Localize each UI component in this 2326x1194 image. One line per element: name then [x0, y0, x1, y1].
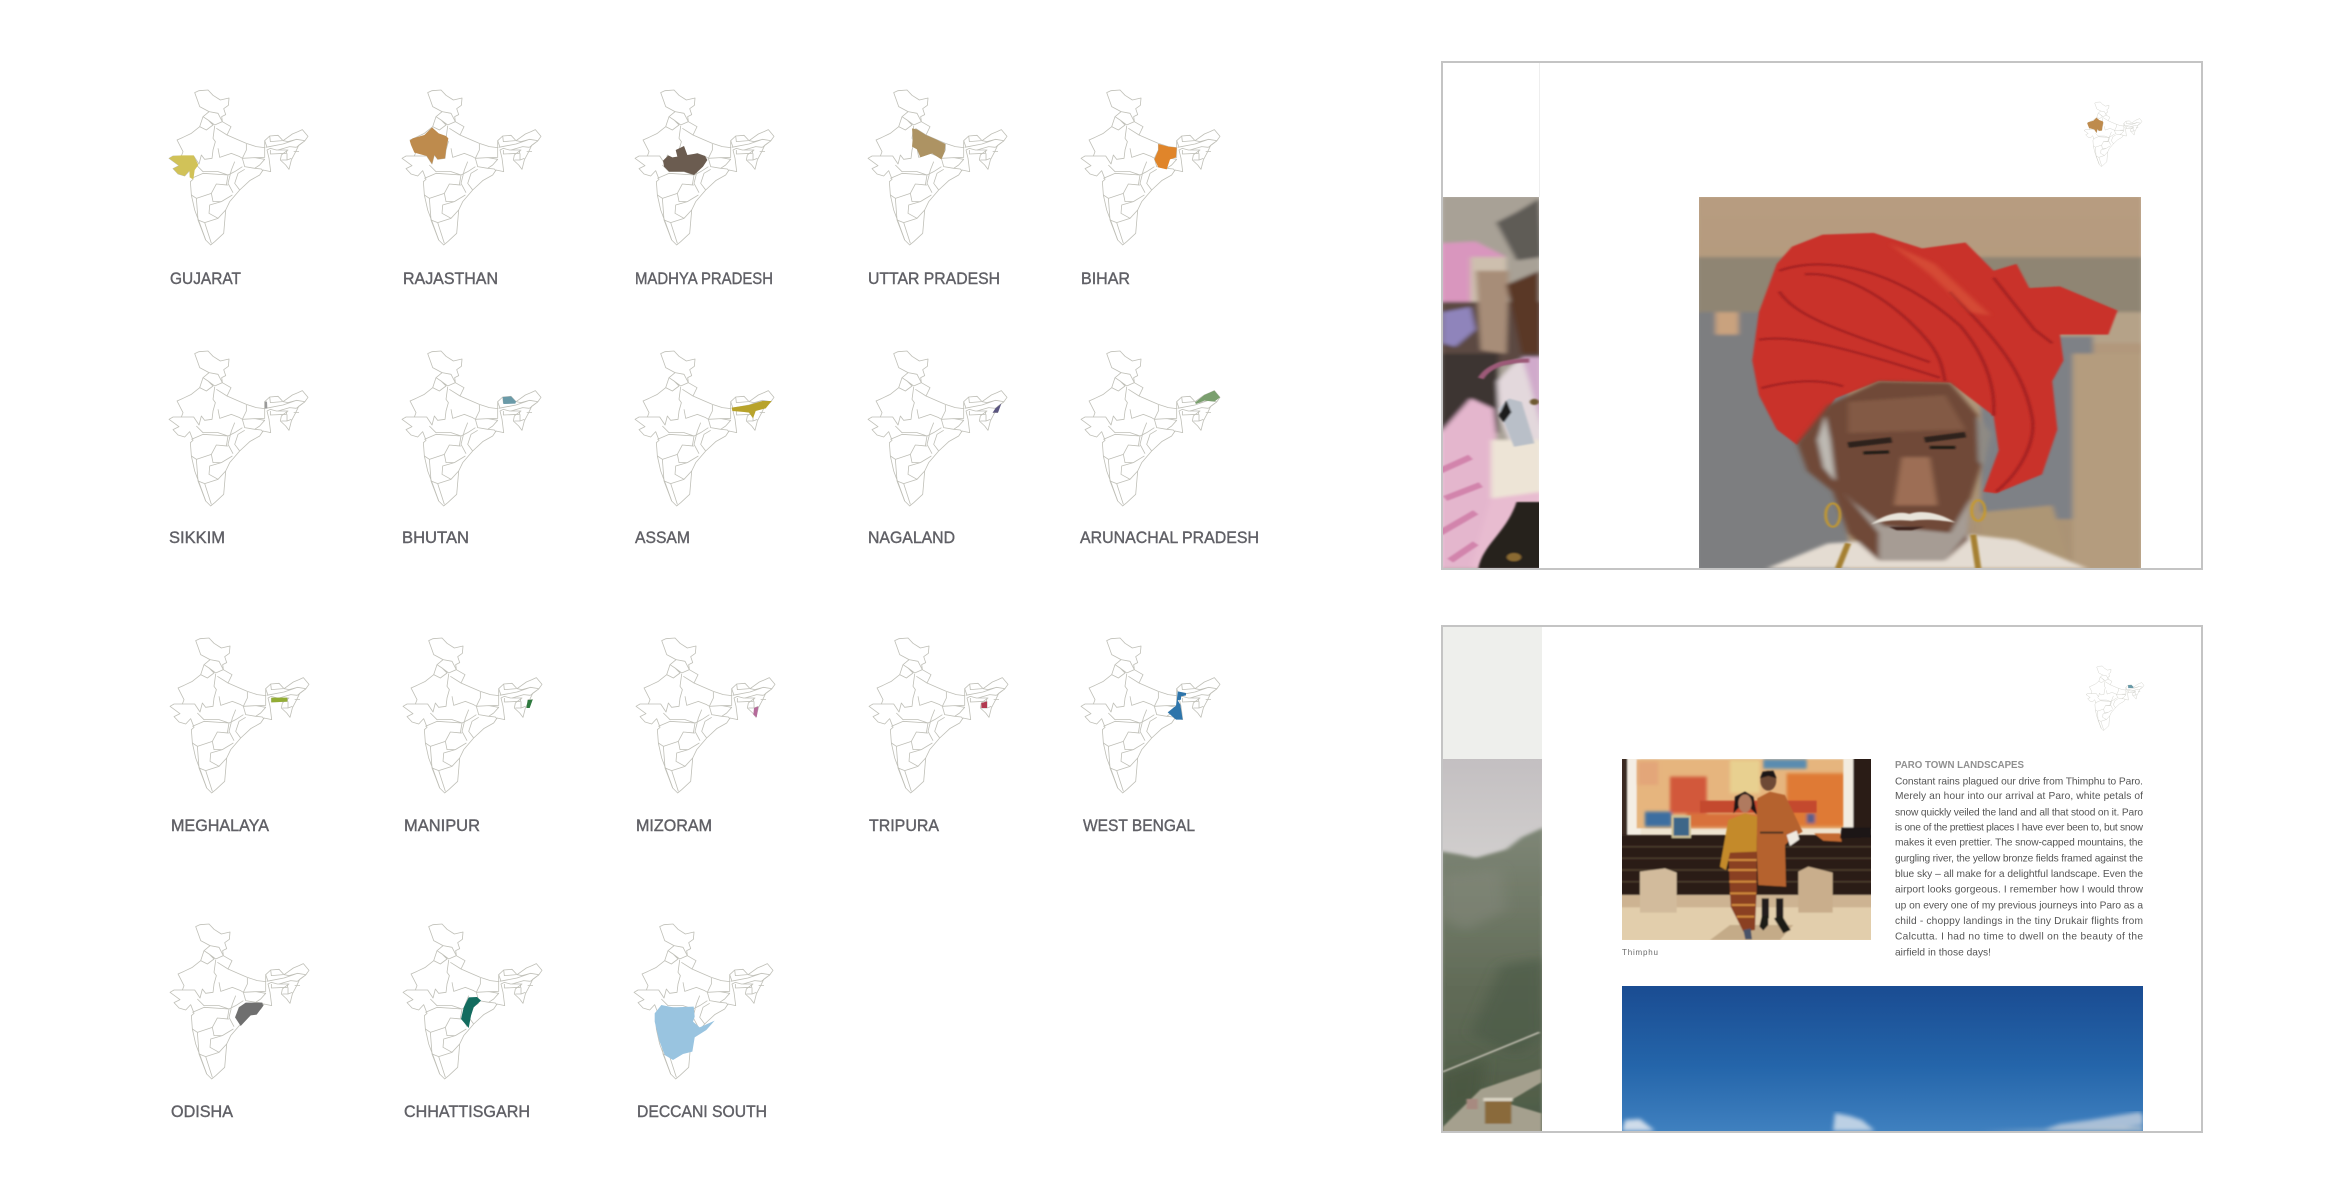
icon: mini India map with Rajasthan highlighted: [2084, 102, 2142, 167]
text block: Paro town landscapes: Merely an hour into our arrival at Paro, white petals of: [1895, 791, 2143, 802]
map tile: Arunachal Pradesh: [1080, 351, 1259, 547]
map tile: Rajasthan: [402, 90, 541, 288]
text block: Paro town landscapes: snow quickly veiled the land and all that stood on it. Paro: [1895, 808, 2143, 818]
photo: couple in Thimphu: [1620, 757, 1873, 943]
map tile: Deccani South: DECCANI SOUTH: [637, 1102, 767, 1121]
map tile: Uttar Pradesh: UTTAR PRADESH: [868, 269, 1000, 288]
map tile: Gujarat: GUJARAT: [170, 269, 241, 288]
map tile: Tripura: [869, 638, 1008, 835]
text block: Paro town landscapes: up on every one of my previous journeys into Paro as a: [1895, 900, 2143, 912]
map tile: Mizoram: [636, 638, 775, 835]
photo: man in red turban: [1695, 195, 2144, 571]
map tile: Mizoram: MIZORAM: [636, 816, 712, 835]
map tile: Assam: ASSAM: [635, 528, 690, 547]
caption: Thimphu: Thimphu: [1622, 948, 1658, 957]
text block: Paro town landscapes: gurgling river, the yellow bronze fields framed against the: [1895, 854, 2143, 864]
photo: snowy forest strip: [1440, 758, 1545, 1134]
map tile: Sikkim: [169, 351, 308, 547]
text block: Paro town landscapes: Constant rains plagued our drive from Thimphu to Paro.: [1895, 776, 2143, 788]
map tile: Madhya Pradesh: [635, 90, 774, 288]
map tile: Nagaland: NAGALAND: [868, 528, 955, 547]
text block: Paro town landscapes: airfield in those days!: [1895, 948, 1991, 958]
icon: mini India map with Bhutan highlighted: [2086, 666, 2144, 731]
text block: Paro town landscapes: is one of the prettiest places I have ever been to, but snow: [1895, 822, 2144, 834]
text block: Paro town landscapes: child - choppy landings in the tiny Drukair flights from: [1895, 916, 2143, 927]
map tile: Bihar: BIHAR: [1081, 269, 1130, 288]
map tile: Meghalaya: [170, 638, 309, 835]
map tile: Deccani South: [634, 924, 773, 1121]
map tile: Arunachal Pradesh: ARUNACHAL PRADESH: [1080, 528, 1259, 547]
panel: Bhutan page layout: [1440, 626, 2202, 1134]
map tile: Meghalaya: MEGHALAYA: [171, 816, 270, 835]
map tile: Bhutan: BHUTAN: [402, 528, 469, 547]
map tile: Uttar Pradesh: [868, 90, 1007, 288]
text block: Paro town landscapes: [1895, 759, 2144, 958]
left grey column: [1443, 627, 1542, 759]
map tile: Bhutan: [402, 351, 541, 547]
map tile: West Bengal: WEST BENGAL: [1083, 816, 1195, 835]
text block: Paro town landscapes: blue sky – all make for a delightful landscape. Even the: [1895, 869, 2143, 880]
map tile: Madhya Pradesh: MADHYA PRADESH: [635, 269, 773, 288]
map tile: Gujarat: [169, 90, 308, 288]
panel: Rajasthan page layout: [1440, 62, 2202, 571]
text block: Paro town landscapes: makes it even prettier. The snow-capped mountains, the: [1895, 838, 2143, 848]
photo: pink-dyed goats strip: [1440, 195, 1542, 571]
photo: blue sky over Paro: [1622, 986, 2143, 1131]
text block: Paro town landscapes: Calcutta. I had no time to dwell on the beauty of the: [1895, 932, 2143, 942]
map tile: Odisha: [170, 924, 309, 1121]
map tile: Sikkim: SIKKIM: [169, 528, 225, 547]
map tile: Chhattisgarh: [403, 924, 542, 1121]
map tile: Bihar: [1081, 90, 1220, 288]
map tile: Odisha: ODISHA: [171, 1102, 234, 1121]
map tile: Assam: [635, 351, 774, 547]
text block: Paro town landscapes: airport looks gorgeous. I remember how I would throw: [1895, 884, 2144, 896]
map tile: Nagaland: [868, 351, 1007, 547]
map tile: West Bengal: [1081, 638, 1220, 835]
map tile: Manipur: [403, 638, 542, 835]
map tile: Manipur: MANIPUR: [404, 816, 480, 835]
map tile: Chhattisgarh: CHHATTISGARH: [404, 1102, 530, 1121]
map tile: Tripura: TRIPURA: [869, 816, 940, 835]
text block: Paro town landscapes: PARO TOWN LANDSCAPES: [1895, 759, 2024, 771]
map tile: Rajasthan: RAJASTHAN: [403, 269, 498, 288]
